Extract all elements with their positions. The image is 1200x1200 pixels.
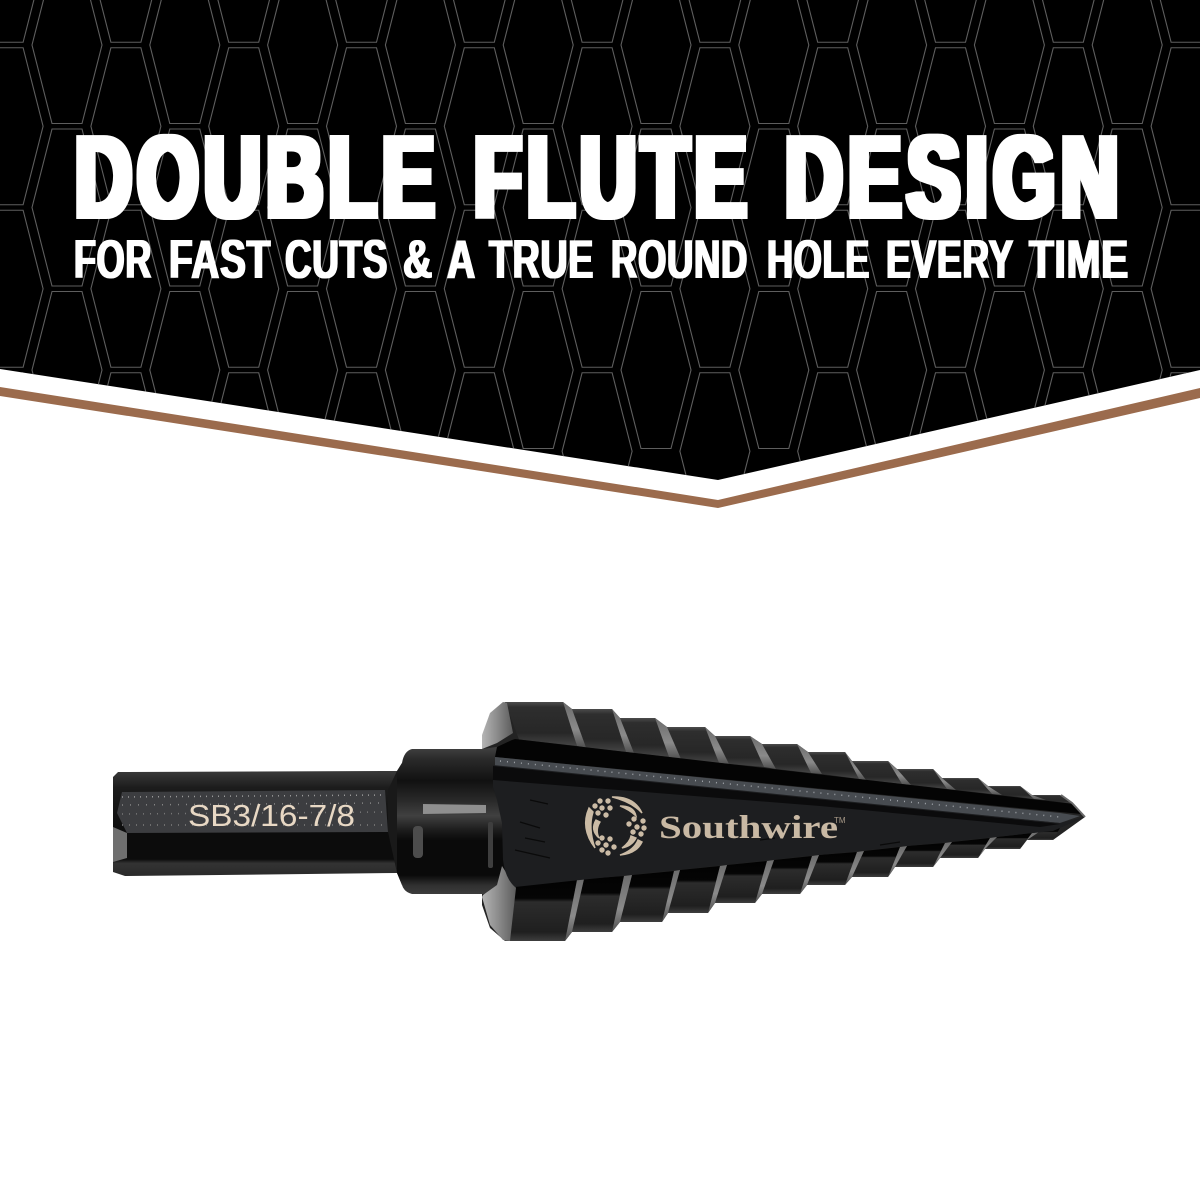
step drill bit bbox=[113, 702, 1085, 941]
drill bit hex shank bbox=[113, 763, 402, 885]
copper chevron line bbox=[0, 387, 1200, 508]
flute edge stripe bbox=[495, 757, 1080, 823]
infographic canvas bbox=[0, 0, 1200, 941]
subtitle: ROUND bbox=[611, 228, 748, 290]
trademark symbol: TM bbox=[834, 816, 846, 825]
upper cutting steps bbox=[505, 702, 1074, 804]
face scratches bbox=[515, 800, 900, 858]
subtitle: FOR bbox=[74, 228, 152, 290]
lower cutting steps bbox=[505, 828, 1060, 941]
subtitle: TIME bbox=[1029, 228, 1129, 290]
subtitle: FAST bbox=[169, 228, 271, 290]
tool tip highlight bbox=[1061, 795, 1085, 817]
subtitle: CUTS bbox=[285, 228, 388, 290]
subtitle: TRUE bbox=[489, 228, 594, 290]
panel: black banner with hexagon pattern bbox=[0, 0, 1200, 530]
face shadow band bbox=[493, 766, 1060, 827]
title: FLUTE bbox=[474, 112, 752, 242]
title: DOUBLE bbox=[75, 112, 440, 242]
subtitle: A bbox=[447, 228, 476, 290]
subtitle: & bbox=[403, 228, 433, 290]
subtitle: EVERY bbox=[886, 228, 1014, 290]
subtitle bbox=[74, 228, 1129, 290]
engraved size marking: SB3/16-7/8 bbox=[188, 798, 355, 833]
drill bit stepped cone silhouette bbox=[482, 702, 1085, 941]
flange chamfers bbox=[482, 702, 516, 941]
flat flute face bbox=[493, 765, 1085, 887]
collar bbox=[397, 745, 510, 894]
black flute channel bbox=[495, 739, 1081, 814]
title bbox=[75, 112, 1124, 242]
Southwire wordmark: Southwire bbox=[659, 810, 838, 846]
Southwire logo mark bbox=[586, 797, 647, 856]
subtitle: HOLE bbox=[767, 228, 870, 290]
